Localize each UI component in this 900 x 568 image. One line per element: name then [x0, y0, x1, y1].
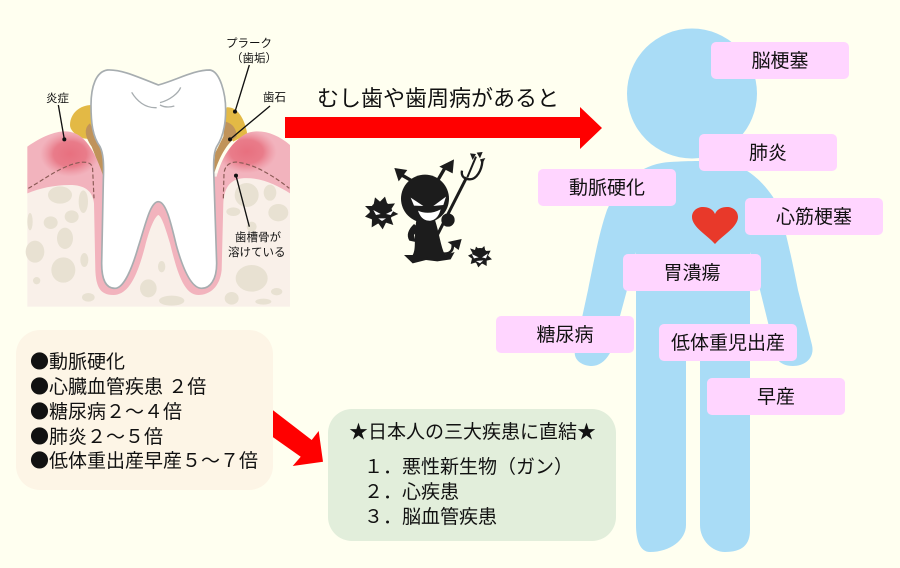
- label: diabetes: [496, 316, 634, 353]
- label: cerebral infarction: 脳梗塞: [751, 51, 808, 72]
- head: [627, 28, 757, 158]
- head: [401, 175, 449, 223]
- label: cerebral infarction: [711, 42, 849, 79]
- label: arteriosclerosis: [538, 169, 676, 206]
- heart: [692, 207, 738, 244]
- label: low birth weight: [659, 324, 797, 360]
- inflamed gum: [42, 132, 274, 174]
- label: premature birth: 早産: [757, 387, 795, 408]
- tooth labels: 溶けている: [228, 246, 286, 259]
- body: [404, 218, 455, 263]
- heading: むし歯や歯周病があると: [317, 86, 559, 111]
- tooth labels: プラーク: [226, 37, 272, 50]
- trident tips: [470, 153, 476, 160]
- label: myocardial infarction: 心筋梗塞: [776, 207, 852, 228]
- tooth fissure: [132, 87, 181, 108]
- hand: [441, 213, 455, 227]
- jaw bone: [26, 173, 290, 307]
- dashed bone line: [28, 162, 289, 198]
- tooth labels: （歯垢）: [231, 52, 277, 65]
- tooth labels: 炎症: [46, 92, 69, 105]
- illustration: devil with germs: [365, 152, 492, 267]
- tooth labels: 歯石: [263, 91, 286, 104]
- germ right: [468, 246, 492, 267]
- tooth labels: [46, 37, 286, 259]
- panel: three major diseases: [328, 409, 616, 541]
- devil eyes: [373, 197, 488, 263]
- label: stomach ulcer: [623, 254, 761, 291]
- disease 3: ３．脳血管疾患: [364, 507, 497, 528]
- arrow: red right: [285, 107, 602, 149]
- antennae: [400, 165, 447, 182]
- panel: risk list: [16, 330, 273, 490]
- diagonal red arrow: [273, 410, 323, 466]
- tartar: [86, 122, 237, 178]
- tail: [442, 245, 453, 254]
- plaque: [70, 105, 247, 142]
- label: low birth weight: 低体重児出産: [671, 332, 785, 354]
- illustration: tooth cross-section: [26, 65, 290, 307]
- risk line 5: ●低体重出産早産５～７倍: [30, 446, 258, 473]
- gum: [27, 131, 290, 295]
- arm: [408, 224, 419, 242]
- label: arteriosclerosis: 動脈硬化: [569, 178, 645, 199]
- label: diabetes: 糖尿病: [536, 325, 594, 346]
- label: myocardial infarction: [745, 198, 883, 235]
- panel heading: ★日本人の三大疾患に直結★: [349, 417, 596, 444]
- label: stomach ulcer: 胃潰瘍: [663, 263, 720, 284]
- disease 2: ２．心疾患: [364, 482, 459, 503]
- tooth labels: 歯槽骨が: [235, 230, 281, 244]
- risk line 1: ●動脈硬化: [30, 347, 125, 374]
- germ left: [365, 197, 398, 229]
- risk line 4: ●肺炎２～５倍: [30, 422, 163, 449]
- disease 1: １．悪性新生物（ガン）: [364, 457, 573, 478]
- label: premature birth: [707, 378, 845, 415]
- torso, arms and legs: [575, 161, 813, 552]
- leader lines: [58, 65, 270, 227]
- human body silhouette: [575, 28, 813, 552]
- label: pneumonia: 肺炎: [749, 143, 787, 164]
- risk line 3: ●糖尿病２～４倍: [30, 397, 182, 424]
- tooth: [91, 70, 226, 288]
- trident: [426, 157, 482, 257]
- risk line 2: ●心臓血管疾患 ２倍: [30, 372, 206, 399]
- label: pneumonia: [699, 134, 837, 171]
